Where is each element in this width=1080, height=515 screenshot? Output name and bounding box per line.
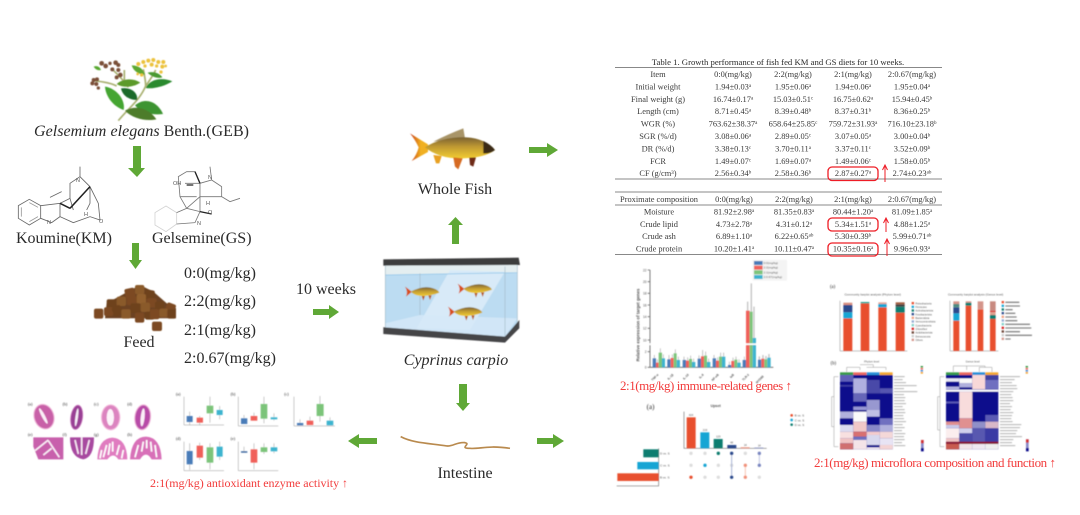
- cross sections: [30, 401, 152, 432]
- table: proximate composition rows: a: [928, 222, 931, 226]
- label: gelsemine: Gelsemine(GS): [152, 230, 252, 247]
- legend: phylum: Actinobacteriota: [915, 310, 934, 313]
- table: growth rows: a: [869, 134, 872, 138]
- panel: intestinal histology: [28, 391, 335, 471]
- legend: 2:2(mg/kg): [764, 266, 778, 270]
- molecule atom labels: OH: [173, 181, 181, 187]
- stacked bars: phylum: [840, 301, 998, 351]
- table: proximate composition rows: Moisture: [644, 208, 674, 216]
- table: growth rows: 1.49±0.06: [835, 157, 869, 166]
- table: growth rows: 16.74±0.17: [713, 95, 751, 104]
- table: proximate composition rows: 4.73±2.78: [716, 220, 750, 229]
- legend: D vs. S: [795, 423, 804, 427]
- table: growth rows: 2.58±0.36: [775, 169, 809, 178]
- table: growth rows: 1.94±0.03: [715, 82, 749, 92]
- table: proximate composition rows: a: [928, 246, 931, 251]
- table: proximate composition rows: a: [752, 209, 755, 214]
- x labels: IL-8: [698, 373, 705, 379]
- table: growth rows: 15.03±0.51: [773, 95, 811, 104]
- panel: plant and feed preparation: [16, 58, 276, 367]
- table title: Table 1. Growth performance of fish fed KM and GS diets for 10 weeks.: [652, 57, 904, 67]
- molecule atom labels: H: [206, 201, 210, 207]
- legend: genus: [1002, 301, 1032, 340]
- axes: [648, 270, 773, 367]
- phylum chart title: Community barplot analysis (Phylum level): [844, 293, 901, 297]
- box plot e: (e): [231, 436, 236, 441]
- table: growth rows: 15.94±0.45: [892, 95, 930, 104]
- x labels: TNF-α: [650, 373, 659, 382]
- axis break: [647, 343, 757, 345]
- bar values: 424: [689, 413, 694, 417]
- error bars: [654, 348, 744, 365]
- heading: plant name: Gelsemium elegans Benth.(GEB): [34, 123, 249, 140]
- legend: phylum: Bacteroidota: [915, 317, 930, 320]
- table: proximate composition rows: 81.92±2.98: [714, 208, 752, 216]
- callout: highlighted cells: [828, 167, 878, 256]
- table: growth rows: CF (g/cm³): [639, 169, 677, 178]
- x labels: NF-κB: [711, 372, 720, 382]
- table: growth rows: b: [934, 121, 937, 126]
- chart title: Upset: [711, 404, 722, 408]
- arrow: intestine to histology: [348, 434, 377, 448]
- heatmap titles: Phylum level: [864, 359, 880, 363]
- table: proximate composition rows: 4.88±1.25: [894, 220, 928, 229]
- tank fish 1: [405, 287, 439, 301]
- table: proximate composition rows: a: [752, 246, 755, 251]
- table: growth rows: a: [869, 170, 872, 176]
- panel: microflora composition: [830, 285, 1032, 451]
- table: growth rows: [631, 70, 937, 178]
- label: feed: Feed: [123, 334, 155, 351]
- legend: B vs. S: [795, 414, 804, 418]
- table: growth rows: a: [928, 84, 931, 89]
- table: growth rows: 0:0(mg/kg): [714, 70, 752, 79]
- label: intestine: Intestine: [437, 465, 493, 482]
- box plot c: (c): [284, 391, 289, 396]
- label: whole fish: Whole Fish: [418, 181, 492, 198]
- table: growth rows: 8.36±0.25: [894, 107, 928, 116]
- y ticks: 2: [645, 350, 647, 354]
- table: growth rows: Item: [650, 70, 666, 79]
- set labels: C vs. S: [660, 464, 670, 468]
- icon: whole carp: [410, 128, 495, 169]
- table: growth rows: a: [809, 84, 812, 89]
- x labels: TLR-2: [741, 373, 750, 382]
- y ticks: 22: [643, 268, 647, 272]
- set size bars: [617, 449, 659, 481]
- heatmap colour keys: [921, 366, 1029, 451]
- table: proximate composition rows: Crude lipid: [640, 220, 679, 229]
- table: proximate composition rows: ab: [927, 234, 932, 238]
- arrow: intestine to gene analysis: [537, 434, 564, 448]
- genus chart title: Community barplot analysis (Genus level): [948, 293, 1003, 297]
- table: proximate composition rows: a: [812, 246, 815, 251]
- legend: phylum: Cyanobacteria: [915, 324, 932, 327]
- arrow: tank to intestine: [456, 384, 470, 411]
- chart: immune-related gene bars: [635, 260, 787, 384]
- table: growth rows: 658.64±25.85: [769, 120, 815, 128]
- table: growth rows: 8.71±0.45: [715, 107, 749, 116]
- label: species: Cyprinus carpio: [404, 352, 508, 369]
- table: proximate composition rows: 9.96±0.93: [894, 244, 928, 254]
- label: duration: 10 weeks: [296, 281, 356, 298]
- box plot c: [284, 391, 335, 426]
- dot matrix: [689, 452, 761, 479]
- panel tags: [28, 401, 133, 437]
- arrow: feed to tank: [313, 305, 339, 319]
- table: growth rows: 8.39±0.48: [775, 107, 809, 116]
- legend: phylum: Fusobacteriota: [915, 313, 932, 316]
- table: growth rows: a: [875, 121, 878, 126]
- table: growth rows: 2.56±0.34: [715, 169, 749, 178]
- caption: microflora: 2:1(mg/kg) microflora composition and function ↑: [814, 455, 1056, 470]
- molecule atom labels: [47, 175, 213, 227]
- legend: phylum: Acidobacteriota: [915, 332, 933, 335]
- panel: fish and tank: [383, 128, 520, 482]
- table: growth rows: a: [749, 108, 752, 114]
- table: growth rows: b: [928, 134, 931, 138]
- table: proximate composition rows: 10.20±1.41: [714, 244, 752, 254]
- legend: phylum: Verrucomicrobiota: [915, 321, 936, 324]
- stacked bars: genus: [953, 301, 996, 351]
- icon: aquarium with carp: [383, 258, 520, 343]
- table: growth rows: 3.37±0.11: [835, 144, 869, 154]
- intersection bars: [687, 417, 763, 448]
- table: growth rows: 2:1(mg/kg): [834, 70, 872, 79]
- table: growth rows: 1.95±0.06: [775, 82, 809, 92]
- arrow: plant to compounds: [128, 146, 145, 177]
- x labels: IL-10: [682, 373, 690, 381]
- legend: 0:0(mg/kg): [764, 261, 778, 265]
- table: proximate composition rows: Crude protein: [636, 244, 683, 254]
- molecule atom labels: O: [208, 210, 213, 216]
- table lines: [615, 68, 942, 254]
- table: growth rows: c: [869, 158, 872, 164]
- table: growth rows: ab: [927, 170, 932, 176]
- table: growth rows: 16.75±0.62: [833, 95, 871, 104]
- legend: phylum: Chloroflexi: [915, 328, 928, 331]
- legend: phylum: Deinococcota: [915, 335, 931, 338]
- arrow: whole fish to table: [529, 143, 558, 157]
- table: growth rows: b: [930, 96, 933, 102]
- x labels: [650, 372, 765, 384]
- arrow: compounds to feed: [129, 243, 142, 269]
- table: proximate composition rows: 81.35±0.83: [774, 208, 812, 216]
- table: growth rows: 3.08±0.06: [715, 132, 749, 141]
- table: proximate composition rows: Crude ash: [642, 232, 677, 241]
- y ticks: 16: [643, 303, 647, 307]
- molecule atom labels: H: [84, 212, 88, 218]
- y ticks: [643, 268, 647, 370]
- panel tags: (e): [28, 432, 33, 437]
- table: proximate composition rows: 4.31±0.12: [776, 220, 810, 229]
- tag a: (a): [830, 285, 836, 290]
- table: proximate composition rows: a: [750, 234, 753, 238]
- table: growth rows: c: [811, 96, 814, 102]
- table: growth rows: a: [869, 84, 872, 89]
- x labels: IL-1β: [666, 373, 674, 381]
- heatmap: genus: [946, 372, 998, 449]
- table: proximate composition rows: 2:1(mg/kg): [834, 195, 872, 204]
- legend: 2:0.67(mg/kg): [764, 275, 782, 279]
- molecule atom labels: N: [47, 220, 51, 226]
- table: growth rows: Length (cm): [637, 107, 679, 116]
- table: growth rows: Initial weight: [636, 82, 681, 92]
- table: growth rows: 1.58±0.05: [894, 157, 928, 166]
- table: growth rows: b: [809, 170, 812, 176]
- table: growth rows: a: [809, 146, 812, 151]
- bar values: 48: [730, 441, 734, 445]
- table: proximate composition rows: a: [871, 209, 874, 214]
- bar values: 219: [703, 428, 708, 432]
- table: proximate composition rows: 5.99±0.71: [893, 232, 927, 241]
- table: growth rows: 1.69±0.07: [775, 157, 809, 166]
- molecule atom labels: N: [208, 175, 212, 181]
- bar values: 14: [744, 443, 747, 447]
- table: growth rows: 2:0.67(mg/kg): [888, 70, 936, 79]
- table: growth rows: a: [749, 84, 752, 89]
- dendrograms: [832, 365, 992, 447]
- table: proximate composition rows: 2:2(mg/kg): [775, 195, 813, 204]
- y ticks: 20: [643, 280, 647, 284]
- table: growth rows: 3.38±0.13: [715, 144, 749, 154]
- table: growth rows: 2.74±0.23: [893, 169, 927, 178]
- icon: koumine structure: [18, 167, 100, 225]
- heatmap: phylum: [840, 372, 893, 449]
- table: growth rows: b: [928, 158, 931, 164]
- table: growth rows: b: [869, 108, 872, 114]
- y ticks: 12: [643, 327, 647, 331]
- panel tags: (g): [94, 432, 99, 437]
- table: proximate composition rows: 5.34±1.51: [835, 220, 869, 229]
- table: growth rows: 3.52±0.09: [894, 144, 928, 154]
- table: growth rows: b: [809, 108, 812, 114]
- table: proximate composition rows: b: [869, 234, 872, 238]
- table: proximate composition rows: a: [812, 209, 815, 214]
- table: growth rows: c: [749, 146, 752, 151]
- table: growth rows: 2:2(mg/kg): [774, 70, 812, 79]
- table: proximate composition rows: 2:0.67(mg/kg): [888, 195, 936, 204]
- table: proximate composition rows: a: [930, 209, 933, 214]
- x labels: IκB: [729, 372, 736, 379]
- table: growth rows: WGR (%): [641, 120, 675, 128]
- icon: Gelsemium elegans plant: [90, 58, 172, 121]
- legend: 2:1(mg/kg): [764, 270, 778, 274]
- panel tags: (a): [28, 401, 33, 406]
- heatmap row labels: [894, 377, 1022, 446]
- table: growth rows: Final weight (g): [631, 95, 685, 104]
- caption: immune-related genes: 2:1(mg/kg) immune-related genes ↑: [620, 378, 792, 393]
- molecule atom labels: N: [76, 178, 80, 184]
- arrows: increase markers: [882, 165, 890, 256]
- table: proximate composition rows: Proximate composition: [620, 195, 699, 204]
- panel: growth performance table: [615, 57, 942, 256]
- table: growth rows: c: [809, 134, 812, 138]
- table: growth rows: b: [928, 146, 931, 151]
- y ticks: 14: [643, 315, 647, 319]
- table: proximate composition rows: 10.11±0.47: [774, 244, 812, 254]
- table: proximate composition rows: 0:0(mg/kg): [715, 195, 753, 204]
- box plot e: [231, 436, 278, 471]
- table: growth rows: a: [871, 96, 874, 102]
- table: growth rows: DR (%/d): [642, 144, 675, 154]
- table: proximate composition rows: 81.09±1.85: [892, 208, 930, 216]
- legend: [790, 414, 804, 427]
- table: proximate composition rows: 5.30±0.39: [835, 232, 869, 241]
- table: proximate composition rows: a: [810, 222, 813, 226]
- box plot b: [231, 391, 278, 426]
- legend: phylum: Others: [915, 339, 924, 342]
- bar values: 123: [716, 435, 721, 439]
- table: growth rows: FCR: [650, 157, 666, 166]
- table: growth rows: c: [869, 146, 872, 151]
- molecule atom labels: O: [99, 219, 104, 225]
- table: proximate composition rows: 80.44±1.20: [833, 208, 871, 216]
- table: growth rows: 2.89±0.05: [775, 132, 809, 141]
- table: growth rows: a: [755, 121, 758, 126]
- red bars: [656, 311, 764, 367]
- molecule atom labels: N: [197, 221, 201, 227]
- table: growth rows: 1.95±0.04: [894, 82, 928, 92]
- table: proximate composition rows: 6.22±0.65: [775, 232, 809, 241]
- arrow: tank to whole fish: [448, 217, 463, 244]
- teal bars: [662, 338, 771, 367]
- set labels: [660, 452, 670, 479]
- tag b: (b): [831, 361, 837, 366]
- table: growth rows: 8.37±0.31: [835, 107, 869, 116]
- table: growth rows: 759.72±31.93: [829, 120, 875, 128]
- y ticks: 0: [645, 366, 647, 370]
- table: growth rows: 2.87±0.27: [835, 169, 869, 178]
- legend: phylum: Firmicutes: [915, 306, 928, 309]
- icon: gelsemine structure: [155, 167, 240, 232]
- legend: C vs. S: [795, 418, 804, 422]
- table: growth rows: a: [749, 134, 752, 138]
- blue bars: [653, 358, 761, 367]
- list: diet ratios: 0:0(mg/kg): [184, 265, 256, 282]
- box plot d: [176, 436, 224, 471]
- bar values: [689, 413, 761, 447]
- tank fish 3: [448, 307, 482, 321]
- label: koumine: Koumine(KM): [16, 230, 112, 247]
- list: diet ratios: [184, 265, 276, 367]
- table: growth rows: b: [928, 108, 931, 114]
- table: proximate composition rows: a: [750, 222, 753, 226]
- chart: upset plot: [617, 403, 804, 486]
- table: growth rows: 3.70±0.11: [775, 144, 809, 154]
- table: growth rows: SGR (%/d): [639, 132, 677, 141]
- panel tags: (d): [127, 401, 133, 406]
- caption: antioxidant activity: 2:1(mg/kg) antioxidant enzyme activity ↑: [150, 476, 348, 490]
- table: growth rows: 1.49±0.07: [715, 157, 749, 166]
- table: proximate composition rows: 6.89±1.10: [716, 232, 750, 241]
- table: growth rows: b: [749, 170, 752, 176]
- panel tag: (a): [647, 403, 655, 411]
- tank fish 2: [458, 284, 492, 298]
- table: growth rows: a: [751, 96, 754, 102]
- axes: [617, 412, 767, 486]
- box plot a: [176, 391, 224, 425]
- table: growth rows: c: [815, 121, 818, 126]
- y axis title: Relative expression of target genes: [635, 288, 640, 361]
- table: proximate composition rows: a: [869, 222, 872, 226]
- magnified sections: [33, 437, 162, 459]
- table: growth rows: 763.62±38.37: [709, 120, 755, 128]
- table: proximate composition rows: [620, 195, 936, 254]
- list: diet ratios: 2:0.67(mg/kg): [184, 350, 276, 367]
- table: growth rows: 1.94±0.06: [835, 82, 869, 92]
- set labels: B vs. S: [660, 475, 669, 479]
- table: growth rows: a: [809, 158, 812, 164]
- x labels: MYD88: [755, 374, 765, 384]
- y ticks: 18: [643, 292, 647, 296]
- panel tags: (f): [63, 432, 67, 437]
- panel tags: (h): [127, 432, 133, 437]
- green bars: [659, 312, 767, 367]
- icon: intestine: [401, 437, 510, 448]
- box plot d: (d): [176, 436, 181, 441]
- box plot b: (b): [231, 391, 236, 396]
- legend: phylum: Proteobacteria: [915, 302, 932, 305]
- list: diet ratios: 2:1(mg/kg): [184, 322, 256, 339]
- set labels: D vs. S: [660, 452, 670, 456]
- bar values: 14: [758, 443, 761, 447]
- table: growth rows: 3.00±0.04: [894, 132, 928, 141]
- list: diet ratios: 2:2(mg/kg): [184, 293, 256, 310]
- table: proximate composition rows: 10.35±0.16: [833, 244, 871, 254]
- table: growth rows: 3.07±0.05: [835, 132, 869, 141]
- legend: phylum: [912, 302, 936, 342]
- genus heatmap title: Genus level: [966, 359, 980, 363]
- table: proximate composition rows: a: [871, 246, 874, 251]
- y ticks: 10: [643, 338, 647, 342]
- legend: [753, 260, 787, 281]
- table: proximate composition rows: ab: [809, 234, 814, 238]
- panel tags: (b): [63, 401, 68, 406]
- icon: feed pellet pile: [94, 285, 177, 331]
- table: growth rows: c: [749, 158, 752, 164]
- panel tags: (c): [94, 401, 99, 406]
- table: growth rows: 716.10±23.18: [888, 120, 934, 128]
- box plot a: (a): [176, 391, 181, 396]
